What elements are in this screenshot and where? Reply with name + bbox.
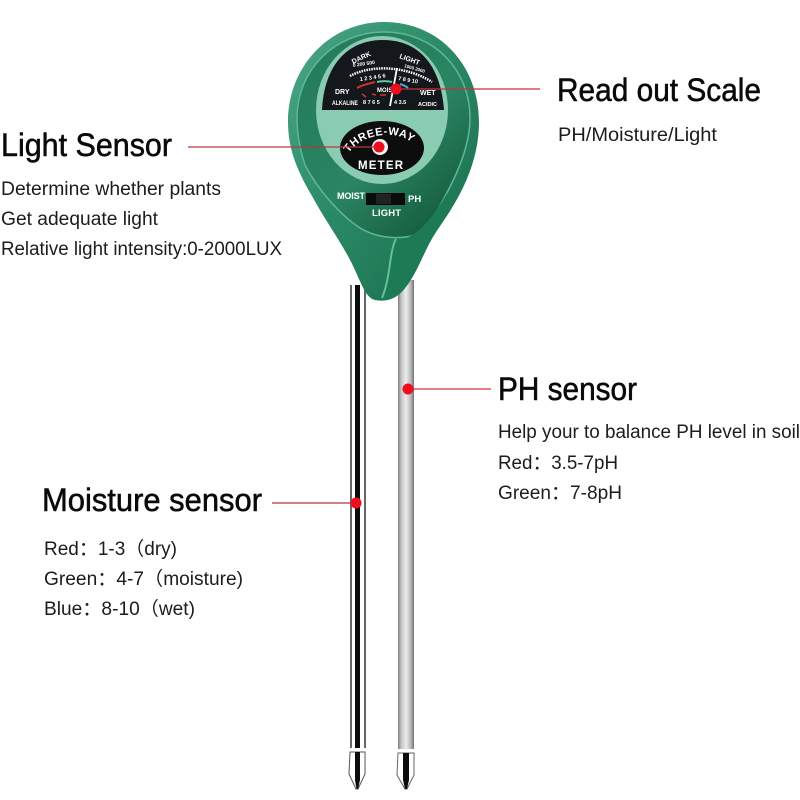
dial labels: MOIS: [377, 88, 392, 94]
description: moisture sensor: [44, 538, 243, 620]
moisture arc: red: [357, 82, 375, 88]
description: pH sensor: Green：7-8pH: [498, 483, 622, 504]
leader line: moisture sensor: [272, 502, 356, 504]
title: PH sensor: PH sensor: [498, 371, 637, 407]
dial labels: DARK: [351, 51, 372, 66]
dial labels: LIGHT: [398, 53, 421, 67]
dial window: [322, 40, 444, 110]
moisture arc: blue: [400, 84, 408, 88]
inner rim panel: [297, 32, 470, 238]
description: light sensor: Determine whether plants: [1, 179, 221, 200]
dot: light sensor: [374, 142, 384, 152]
description: pH sensor: [498, 422, 800, 504]
dial labels: ALKALINE: [332, 101, 358, 107]
dot: pH sensor: [402, 384, 414, 394]
moisture arc: green: [377, 80, 392, 83]
mode switch: [337, 191, 421, 219]
needle: [390, 68, 397, 106]
ph marks: [362, 94, 386, 97]
mode switch: LIGHT: [372, 208, 401, 219]
title: Read out Scale: Read out Scale: [557, 72, 761, 108]
mode switch: MOIST: [337, 191, 366, 201]
title: Light Sensor: Light Sensor: [1, 127, 172, 163]
left probe: moisture rod: [349, 285, 366, 789]
dial labels: 1 2 3 4 5 6: [359, 73, 386, 83]
dial labels: [332, 51, 437, 108]
description: moisture sensor: Green：4-7（moisture): [44, 568, 243, 590]
dot: moisture sensor: [350, 498, 362, 508]
description: moisture sensor: Red：1-3（dry): [44, 538, 177, 560]
three-way meter badge: METER: [358, 160, 404, 172]
leader line: light sensor: [188, 146, 379, 148]
dial labels: 4 3.5: [394, 100, 406, 106]
three-way meter badge: THREE-WAY: [342, 127, 416, 151]
leader line: pH sensor: [408, 388, 491, 390]
leader line: read out scale: [396, 88, 540, 90]
dot: read out scale: [390, 84, 402, 94]
description: moisture sensor: Blue：8-10（wet): [44, 598, 195, 620]
dial labels: ACIDIC: [418, 102, 437, 108]
description: light sensor: Get adequate light: [1, 209, 159, 230]
dial labels: 7 8 9 10: [398, 76, 418, 85]
description: read out scale: PH/Moisture/Light: [558, 125, 718, 146]
dial labels: 0 200 500: [352, 60, 376, 69]
scale arc: [350, 68, 432, 82]
description: pH sensor: Help your to balance PH level in soil: [498, 422, 800, 443]
dial labels: WET: [420, 90, 436, 97]
callout: read out scale: [390, 72, 761, 146]
mode switch: PH: [408, 194, 421, 205]
description: pH sensor: Red：3.5-7pH: [498, 453, 618, 474]
tail swoosh highlight: [382, 239, 396, 298]
callout: light sensor: [1, 127, 384, 260]
right probe: pH rod: [397, 280, 414, 789]
title: Moisture sensor: Moisture sensor: [42, 482, 262, 518]
dial labels: DRY: [335, 89, 350, 96]
dial labels: 8 7 6 5: [363, 100, 380, 106]
three-way meter badge: [340, 121, 424, 175]
callout: moisture sensor: [42, 482, 362, 620]
meter body: [288, 22, 479, 301]
description: light sensor: [1, 179, 282, 260]
dial labels: 1000 2000: [404, 63, 426, 74]
mint face: [316, 36, 448, 184]
lower body tail: [382, 192, 448, 300]
description: light sensor: Relative light intensity:0-2000LUX: [1, 239, 282, 260]
callout: pH sensor: [402, 371, 800, 504]
outer shell: [288, 22, 479, 301]
